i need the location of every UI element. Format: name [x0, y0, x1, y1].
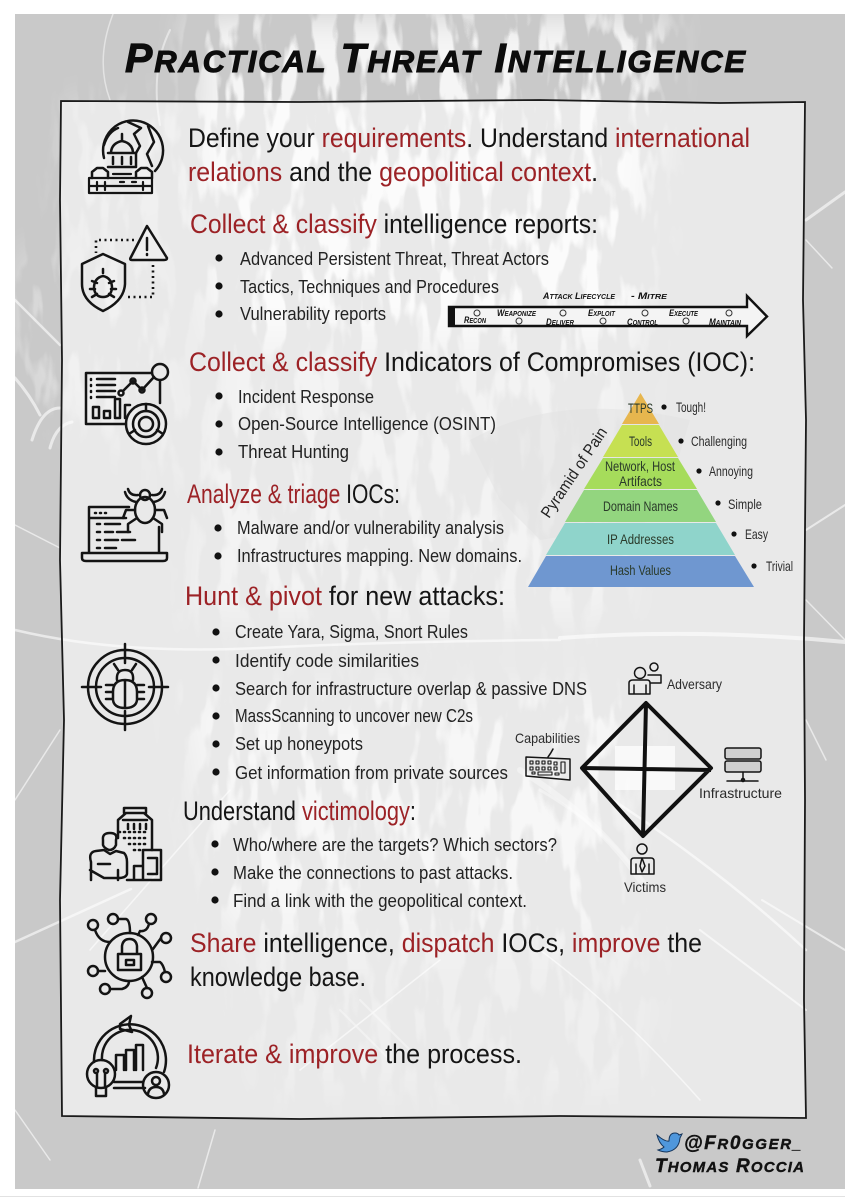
- attack lifecycle arrow: WEAPONIZE: [497, 308, 536, 318]
- bullet list: Threat Hunting: [238, 442, 349, 462]
- section: share intelligence: [88, 914, 702, 998]
- diamond model: [515, 663, 782, 895]
- icon: shield and warning: [82, 226, 167, 311]
- pyramid of pain: Annoying: [709, 463, 753, 479]
- icon: target bug: [82, 644, 168, 730]
- heading: Iterate & improve the process.: [187, 1039, 522, 1069]
- bullet list: Who/where are the targets? Which sectors?: [233, 835, 557, 855]
- icon: victim: [631, 844, 654, 874]
- section: hunt and pivot: [82, 581, 782, 895]
- heading: Collect & classify Indicators of Compromises (IOC):: [189, 347, 755, 377]
- main panel: [60, 100, 806, 1119]
- pyramid of pain: Pyramid of Pain: [538, 425, 611, 521]
- label: infrastructure: Infrastructure: [699, 785, 782, 801]
- bullet list: Create Yara, Sigma, Snort Rules: [235, 622, 468, 642]
- pyramid of pain: TTPS: [628, 400, 653, 416]
- attack lifecycle arrow: CONTROL: [627, 317, 658, 327]
- pyramid of pain: Artifacts: [619, 473, 662, 489]
- pyramid of pain: Trivial: [766, 558, 793, 574]
- pyramid of pain: [528, 393, 793, 587]
- section: iterate: [87, 1016, 522, 1098]
- section: requirements: [89, 121, 750, 193]
- attack lifecycle arrow: ATTACK LIFECYCLE: [542, 291, 615, 301]
- label: adversary: Adversary: [667, 676, 722, 692]
- pyramid of pain: IP Addresses: [607, 531, 674, 547]
- bullet list: Find a link with the geopolitical context.: [233, 891, 527, 911]
- pyramid of pain: Easy: [745, 526, 768, 542]
- bullet list: Identify code similarities: [235, 651, 419, 671]
- attack lifecycle arrow: EXPLOIT: [588, 308, 616, 318]
- heading: Analyze & triage IOCs:: [187, 479, 400, 509]
- label: victims: Victims: [624, 879, 666, 895]
- attack lifecycle arrow: EXECUTE: [669, 308, 698, 318]
- icon: adversary: [629, 663, 661, 694]
- pyramid of pain: Tough!: [676, 399, 706, 415]
- author name: THOMAS ROCCIA: [655, 1156, 804, 1177]
- bullet list: [215, 249, 549, 324]
- section: analyze and triage: [82, 479, 522, 566]
- section: indicators of compromise: [86, 347, 793, 587]
- attack lifecycle arrow: [449, 291, 767, 336]
- attack lifecycle arrow: - M ITRE: [631, 291, 667, 301]
- pyramid of pain: Network, Host: [605, 458, 675, 474]
- faint dark shape behind the pyramid: [470, 409, 690, 540]
- pyramid of pain: Hash Values: [610, 562, 671, 578]
- heading: Hunt & pivot for new attacks:: [185, 581, 505, 611]
- bullet list: Make the connections to past attacks.: [233, 863, 513, 883]
- heading line 1: Share intelligence, dispatch IOCs, improve the: [190, 928, 702, 958]
- heading line 2: knowledge base.: [190, 962, 366, 992]
- heading: Collect & classify intelligence reports:: [190, 209, 598, 239]
- twitter handle: @FR0GGER_: [684, 1133, 801, 1154]
- attack lifecycle arrow: RECON: [464, 315, 487, 325]
- attack lifecycle arrow: MAINTAIN: [709, 317, 742, 327]
- pyramid of pain: Simple: [728, 496, 762, 512]
- bullet list: Malware and/or vulnerability analysis: [237, 518, 504, 538]
- bullet list: Advanced Persistent Threat, Threat Actors: [240, 249, 549, 269]
- bullet list: [214, 518, 522, 566]
- heading line 1: Define your requirements. Understand international: [188, 123, 750, 153]
- pyramid of pain: Challenging: [691, 433, 747, 449]
- bullet list: [211, 835, 557, 911]
- heading: Understand victimology:: [183, 796, 416, 826]
- bullet list: Get information from private sources: [235, 763, 508, 783]
- icon: twitter bird: [657, 1133, 682, 1152]
- bullet list: [215, 387, 496, 462]
- icon: laptop and spider: [82, 489, 167, 561]
- pyramid of pain: Tools: [629, 433, 652, 449]
- bullet list: MassScanning to uncover new C2s: [235, 706, 473, 726]
- bullet list: Open-Source Intelligence (OSINT): [238, 414, 496, 434]
- bullet list: Set up honeypots: [235, 734, 363, 754]
- pyramid of pain: Domain Names: [603, 498, 678, 514]
- bullet list: Tactics, Techniques and Procedures: [240, 277, 499, 297]
- section: intelligence reports: [82, 209, 767, 336]
- bullet list: Vulnerability reports: [240, 304, 386, 324]
- author credit: [655, 1133, 804, 1177]
- title: PRACTICAL THREAT INTELLIGENCE: [125, 35, 746, 81]
- bullet list: Infrastructures mapping. New domains.: [237, 546, 522, 566]
- icon: dashboard: [86, 364, 168, 444]
- bullet list: [212, 622, 587, 783]
- icon: capitol and globe: [89, 121, 163, 193]
- section: victimology: [90, 796, 557, 911]
- icon: server: [725, 748, 761, 782]
- label: capabilities: Capabilities: [515, 730, 580, 746]
- icon: improvement cycle: [87, 1016, 169, 1098]
- heading line 2: relations and the geopolitical context.: [188, 157, 598, 187]
- bullet list: Incident Response: [238, 387, 374, 407]
- icon: network lock: [88, 914, 171, 998]
- attack lifecycle arrow: DELIVER: [546, 317, 574, 327]
- bullet list: Search for infrastructure overlap & passive DNS: [235, 679, 587, 699]
- icon: building and analyst: [90, 808, 161, 880]
- icon: keyboard: [526, 749, 570, 780]
